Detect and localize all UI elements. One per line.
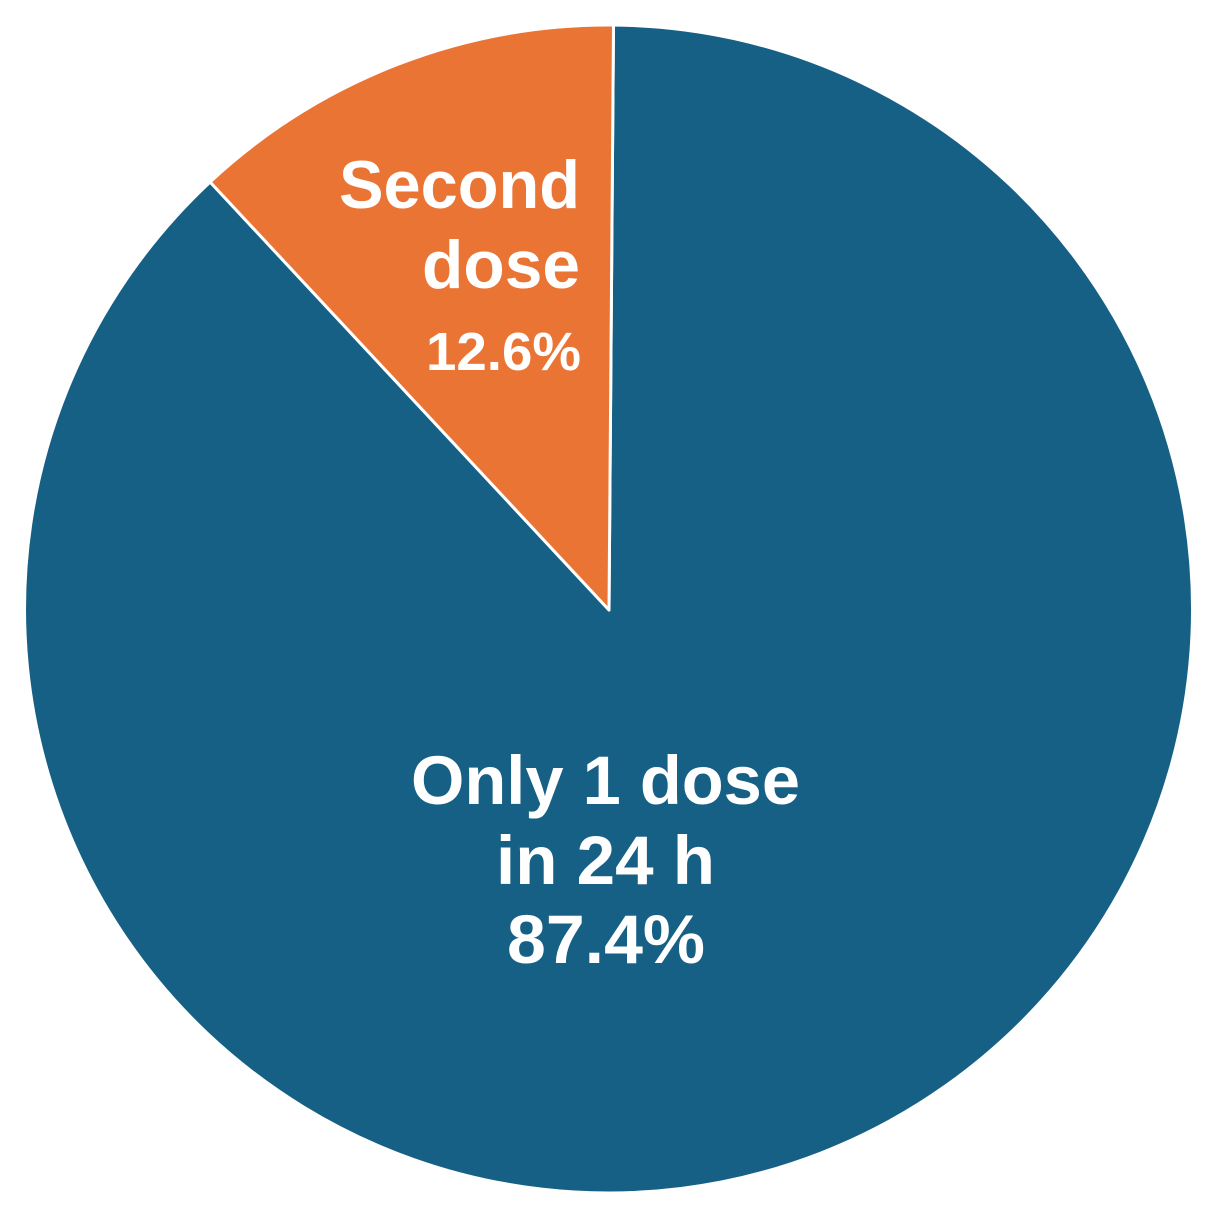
label: second dose: dose xyxy=(422,227,580,303)
label: second dose: 12.6% xyxy=(426,322,581,382)
label: second dose xyxy=(339,147,581,382)
slice: second dose 12.6% xyxy=(210,25,614,610)
label: only 1 dose: in 24 h xyxy=(496,822,715,899)
label: second dose: Second xyxy=(339,147,580,223)
label: only 1 dose: 87.4% xyxy=(507,901,705,978)
label: only 1 dose: Only 1 dose xyxy=(411,742,800,819)
label: only 1 dose xyxy=(411,742,800,978)
